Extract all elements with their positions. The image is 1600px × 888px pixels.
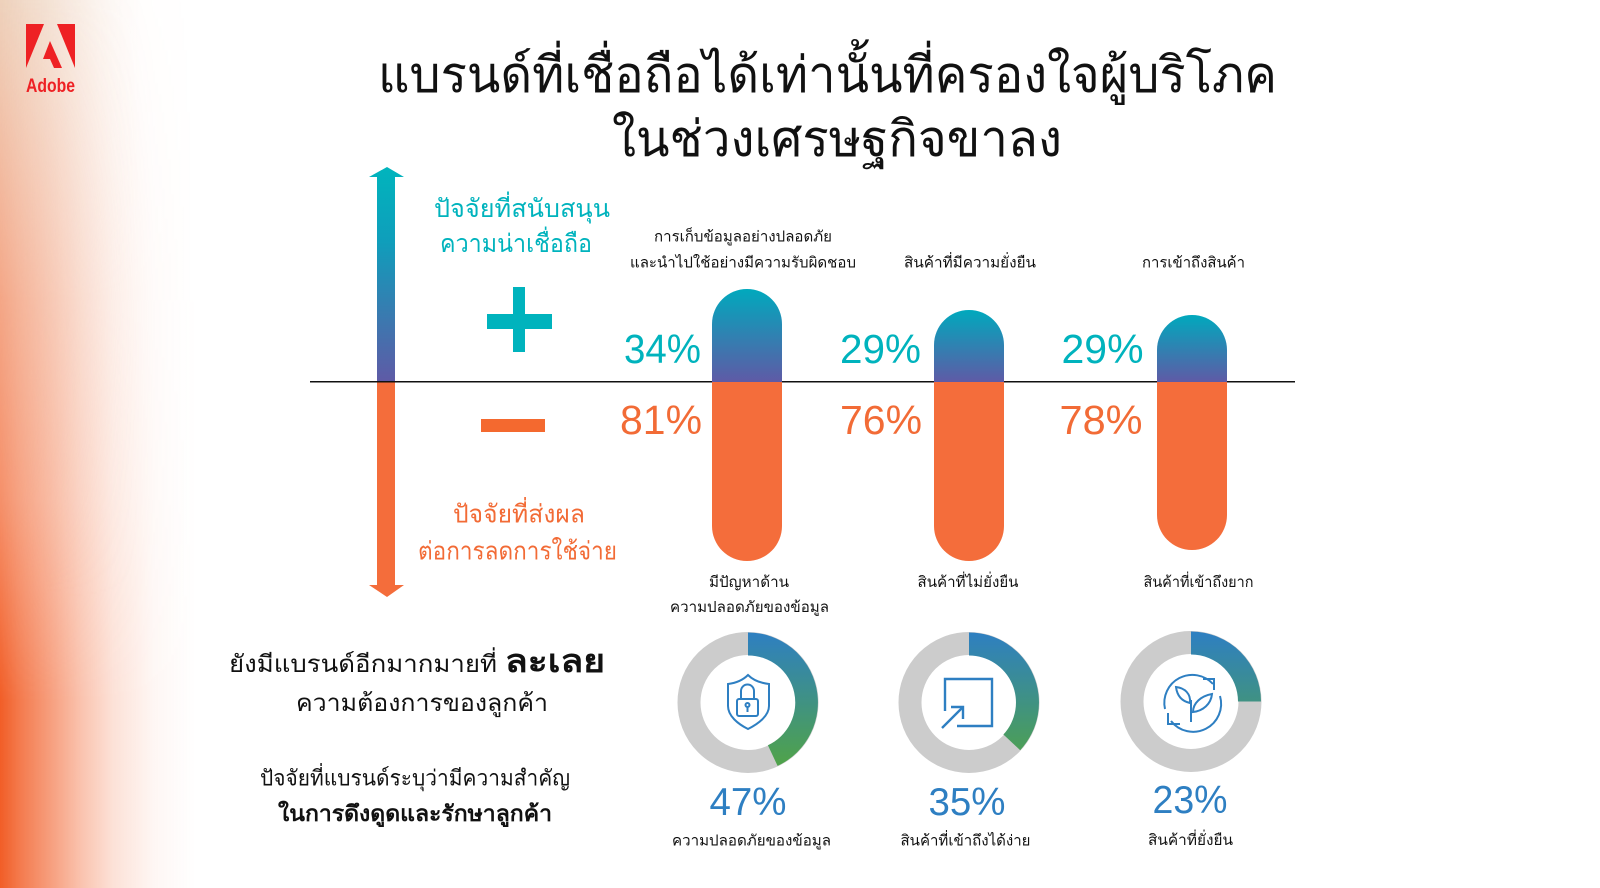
icon: minus: [481, 419, 545, 432]
bar chart: column 1: [620, 289, 782, 561]
donut: data security 47%: 47%: [710, 781, 786, 824]
left statement text: [229, 643, 605, 828]
donut: easy access 35%: [900, 632, 1039, 850]
left statement text: ในการดึงดูดและรักษาลูกค้า: [278, 800, 552, 828]
bar chart: column 3: 78%: [1060, 397, 1142, 443]
heading: supporting factors: [434, 191, 610, 258]
bar labels bottom: มีปัญหาด้าน: [709, 574, 789, 591]
heading: spending factors: [418, 496, 617, 566]
bar labels bottom: สินค้าที่เข้าถึงยาก: [1144, 571, 1254, 591]
left statement text: ละเลย: [505, 643, 605, 679]
left statement text: ปัจจัยที่แบรนด์ระบุว่ามีความสำคัญ: [260, 762, 570, 792]
bar labels top: การเก็บข้อมูลอย่างปลอดภัย: [654, 226, 832, 246]
heading: supporting factors: ปัจจัยที่สนับสนุน: [434, 191, 610, 224]
bar labels bottom: ความปลอดภัยของข้อมูล: [670, 599, 829, 616]
bar chart: column 1: 81%: [620, 397, 702, 443]
icon: access arrow square: [942, 679, 992, 728]
bar chart: column 3: 29%: [1062, 326, 1144, 372]
bar chart: column 1: 34%: [624, 326, 701, 372]
title: [378, 39, 1277, 169]
arrow: up, trust factors: [369, 167, 404, 382]
logo: Adobe: [26, 24, 75, 97]
title: แบรนด์ที่เชื่อถือได้เท่านั้นที่ครองใจผู้บริโภค: [378, 39, 1277, 105]
donut: easy access 35%: 35%: [928, 781, 1006, 824]
bar labels top: สินค้าที่มีความยั่งยืน: [904, 252, 1036, 272]
left statement text: ความต้องการของลูกค้า: [296, 690, 548, 718]
icon: shield lock: [728, 675, 769, 729]
donut: sustainable 23%: สินค้าที่ยั่งยืน: [1148, 829, 1233, 849]
heading: spending factors: ปัจจัยที่ส่งผล: [453, 496, 585, 528]
bar chart: column 2: 29%: [840, 326, 921, 372]
bar labels top: การเข้าถึงสินค้า: [1142, 254, 1245, 272]
bar labels top: และนำไปใช้อย่างมีความรับผิดชอบ: [630, 254, 856, 272]
donut: data security 47%: [672, 632, 831, 850]
donut: easy access 35%: สินค้าที่เข้าถึงได้ง่าย: [900, 830, 1030, 850]
logo: Adobe: Adobe: [26, 76, 75, 97]
donut: sustainable 23%: [1132, 632, 1261, 849]
heading: spending factors: ต่อการลดการใช้จ่าย: [418, 536, 617, 566]
title: ในช่วงเศรษฐกิจขาลง: [612, 111, 1062, 169]
icon: plus: [487, 287, 552, 352]
background: orange gradient on left edge: [0, 0, 164, 888]
bar labels bottom: [670, 571, 1254, 616]
bar chart: column 2: [840, 310, 1004, 561]
bar chart: column 2: 76%: [840, 397, 922, 443]
icon: sustainable plant: [1164, 675, 1221, 732]
donut: sustainable 23%: 23%: [1152, 779, 1228, 822]
bar labels top: [630, 226, 1245, 272]
bar labels bottom: สินค้าที่ไม่ยั่งยืน: [918, 571, 1018, 591]
donut: data security 47%: ความปลอดภัยของข้อมูล: [672, 832, 831, 850]
heading: supporting factors: ความน่าเชื่อถือ: [440, 226, 592, 258]
axis line: [310, 381, 1295, 382]
arrow: down, spending reduction: [369, 382, 404, 597]
bar chart: column 3: [1060, 315, 1227, 550]
left statement text: ยังมีแบรนด์อีกมากมายที่: [229, 647, 497, 678]
